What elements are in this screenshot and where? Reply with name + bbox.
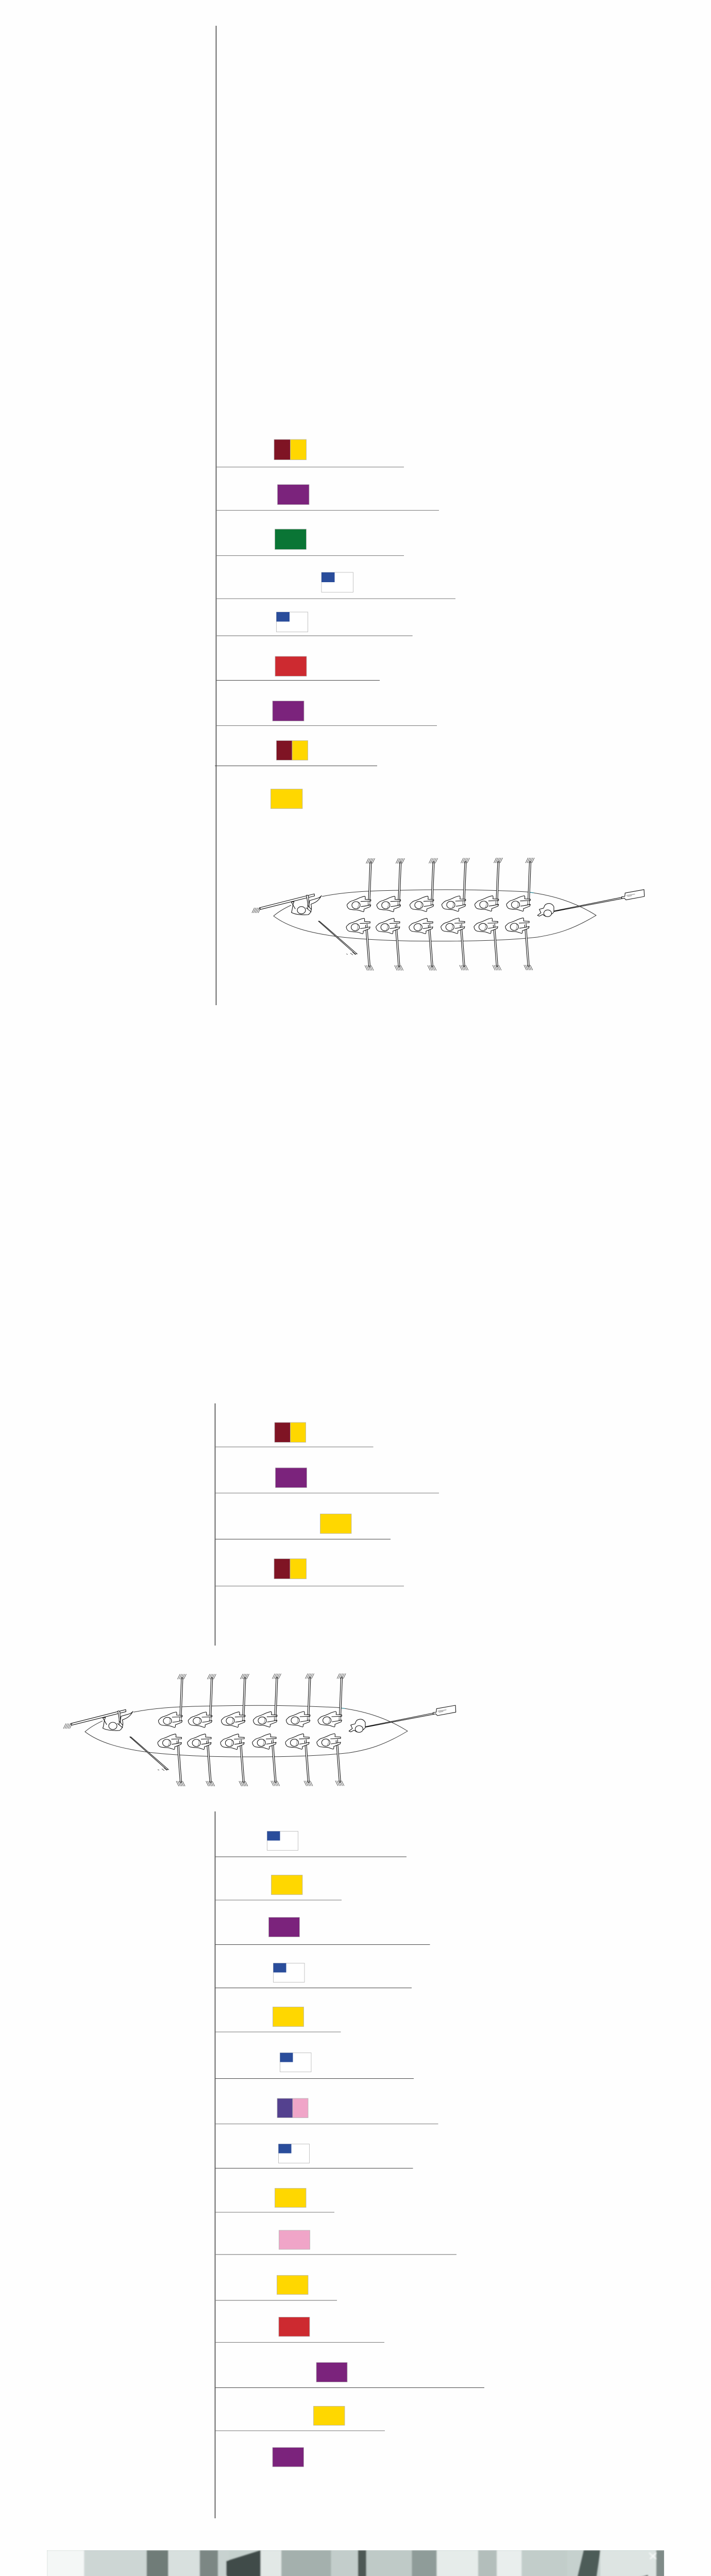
row: purple flag [273, 2447, 304, 2467]
row: red flag [215, 2317, 384, 2342]
row: green flag [216, 529, 404, 555]
row: white flag with blue canton [215, 2144, 413, 2168]
photo base tone [47, 2550, 664, 2576]
row: purple flag [216, 701, 437, 725]
section 1 axis line [215, 26, 216, 1005]
row: yellow flag [215, 2189, 334, 2212]
section 3 chart rows [215, 1831, 484, 2467]
row: yellow flag [271, 789, 302, 809]
row: yellow flag [215, 2007, 341, 2032]
section 2 chart rows [215, 1422, 439, 1586]
trees, banners and ground [47, 2550, 665, 2576]
section 1 chart rows [215, 439, 455, 809]
row: red flag [216, 656, 380, 680]
row: maroon and yellow flag [215, 1559, 404, 1586]
row: purple flag [216, 484, 439, 510]
row: maroon and yellow flag [216, 439, 404, 467]
historic group photograph [47, 2550, 664, 2576]
row: purple flag [215, 2363, 484, 2387]
section 2 axis line [214, 1403, 215, 1646]
row: yellow flag [215, 2275, 337, 2300]
row: yellow flag [215, 1514, 391, 1539]
row: purple flag [215, 1468, 439, 1493]
row: pink flag [215, 2230, 456, 2255]
rowing boat diagram 1 [252, 858, 645, 971]
man on far right in overcoat [613, 2575, 664, 2576]
rowing boat diagram 2 [63, 1673, 456, 1786]
row: violet and pink flag [215, 2098, 438, 2124]
section 3 axis line [214, 1811, 215, 2518]
row: white flag with blue canton [216, 612, 413, 636]
row: yellow flag [215, 2406, 385, 2431]
row: maroon and yellow flag [215, 1422, 373, 1447]
row: white flag with blue canton [215, 1831, 407, 1857]
row: maroon and yellow flag [215, 741, 377, 766]
row: white flag with blue canton [216, 572, 455, 599]
row: white flag with blue canton [215, 1963, 412, 1988]
row: yellow flag [215, 1875, 342, 1900]
row: white flag with blue canton [215, 2053, 414, 2078]
photo scene: crowd, trees and banners [39, 2550, 665, 2576]
row: purple flag [215, 1918, 430, 1944]
